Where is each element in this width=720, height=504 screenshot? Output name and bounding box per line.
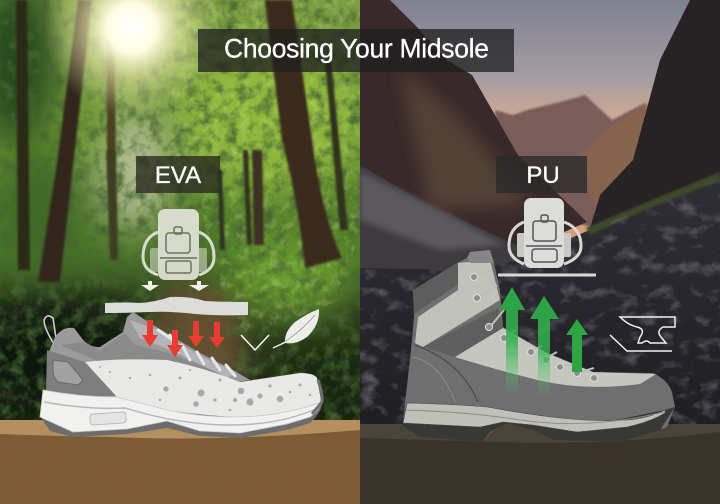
icon: backpack PU [509,198,581,268]
forest trees [16,0,348,282]
rock field [360,178,720,425]
title [198,29,514,72]
label: PU: PU [526,162,560,189]
PU boot [403,250,675,442]
support bar [498,274,596,276]
upper [46,312,250,400]
midsole [403,403,665,432]
panel: ground right [360,424,720,504]
grey scree slope [360,165,560,330]
right cliff [590,0,720,228]
title: Choosing Your Midsole [224,34,489,64]
midsole [40,390,322,433]
icon: checkmark [241,335,269,350]
red compression arrows [142,320,225,357]
label: EVA [136,156,220,193]
label: EVA: EVA [155,162,201,189]
tongue [467,250,494,263]
panel: forest background [0,0,395,425]
heel panel [46,350,117,398]
left mountain [360,0,587,260]
icon: anvil [610,317,675,351]
foam pad [105,297,248,315]
white load arrows [141,281,209,291]
heel loop [44,316,56,344]
toe light panel [455,328,656,387]
side panel lines [414,345,478,402]
boot body [403,250,675,442]
icon: feather [273,309,319,348]
forest path [130,285,250,420]
outsole [40,400,323,438]
collar [413,263,460,314]
label: PU [496,156,587,193]
upper light panel [415,260,500,347]
sun [44,0,220,116]
toe edge [312,380,322,414]
icon: backpack EVA [143,209,214,280]
panel: ground left [0,420,360,504]
lace eyelets [475,270,594,372]
outsole [403,407,675,442]
laces [158,330,235,376]
EVA shoe [40,312,323,438]
speckled toe [85,359,321,417]
panel: mountain background [360,0,720,425]
green rebound arrows [499,287,588,396]
